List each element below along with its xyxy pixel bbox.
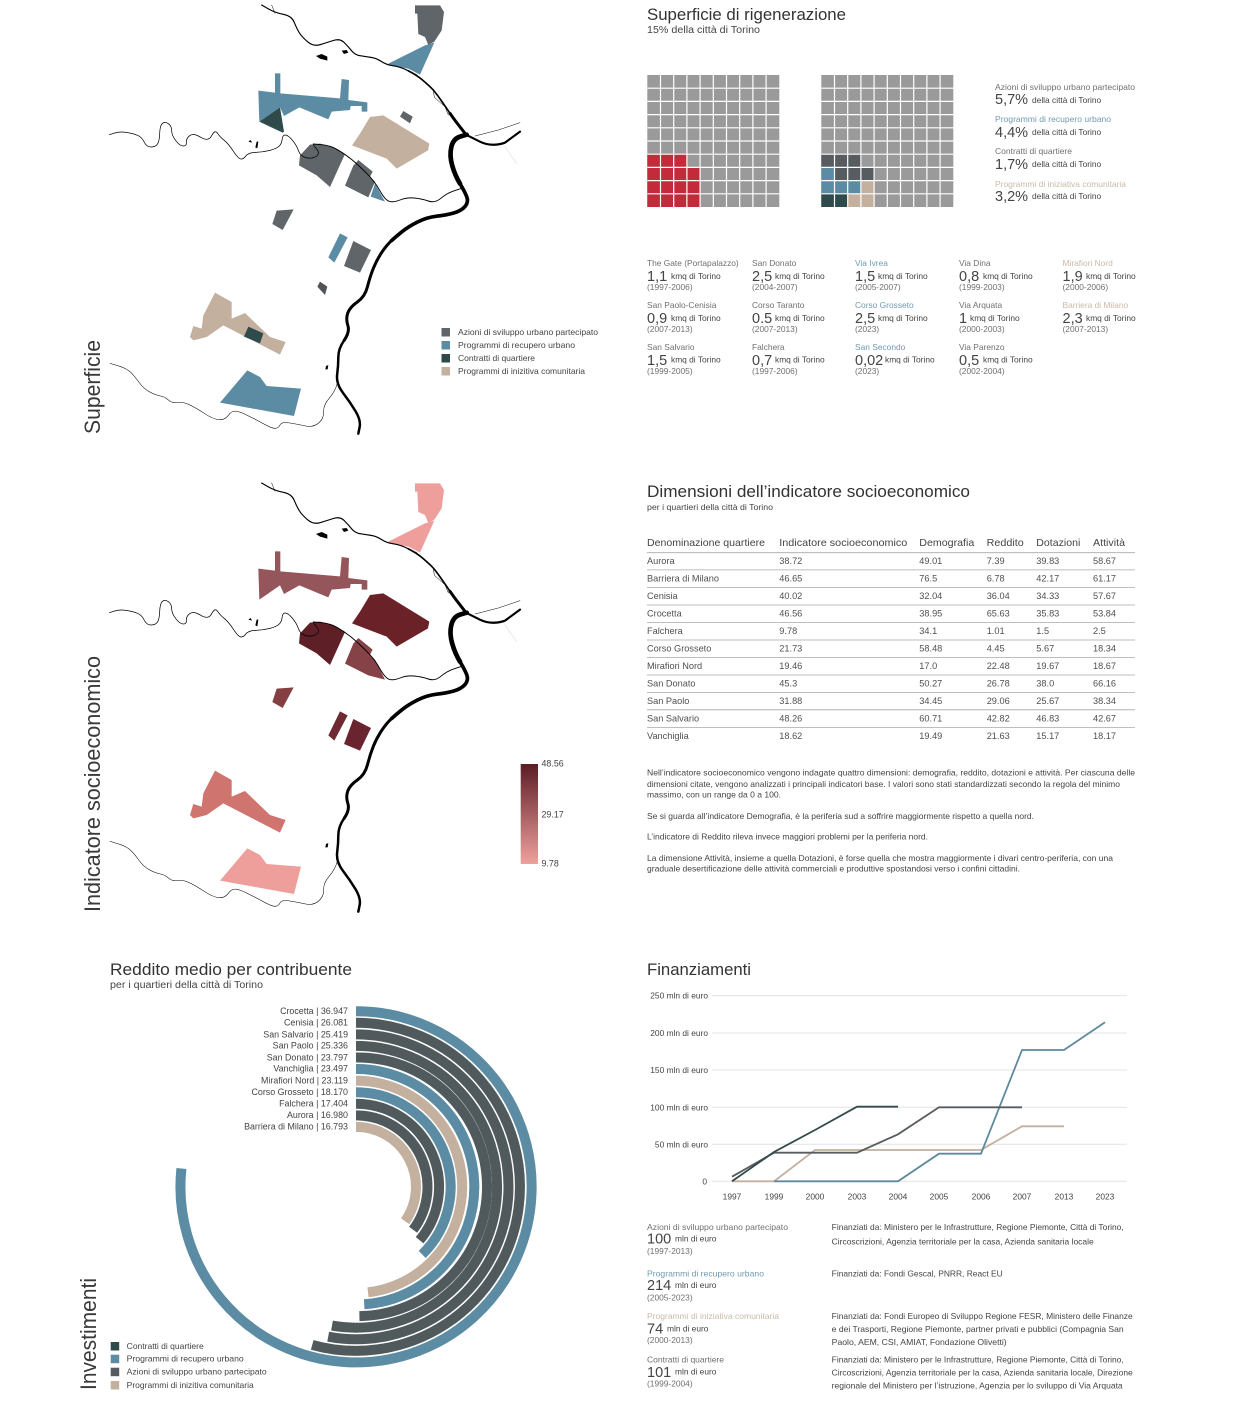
waffle legend with percentages: Azioni di sviluppo urbano partecipato <box>995 82 1135 92</box>
radial chart labels: Cenisia | 26.081 <box>284 1018 348 1028</box>
funding sources text: Paolo, AEM, CSI, AMIAT, Fondazione Olivetti) <box>832 1337 1007 1347</box>
legend: radial chart: Azioni di sviluppo urbano partecipato <box>127 1367 267 1377</box>
list of districts with area and years <box>647 258 1136 376</box>
waffle legend with percentages: 3,2% <box>995 189 1028 205</box>
table header: Denominazione quartiere <box>647 538 765 549</box>
list of districts with area and years: 2,3 <box>1062 311 1083 327</box>
text block: indicator explanation: graduale desertificazione delle attività commerciali e produttive spostandosi verso i confini cittadini. <box>647 864 1020 874</box>
funding summary: amounts per programme: 101 <box>647 1365 671 1381</box>
table: socioeconomic dimensions by district: 18.67 <box>1093 661 1116 671</box>
y axis labels: 50 mln di euro <box>655 1139 708 1149</box>
table: socioeconomic dimensions by district: 46.83 <box>1036 713 1059 723</box>
table: socioeconomic dimensions by district: 38.72 <box>779 556 802 566</box>
funding summary: amounts per programme: mln di euro <box>675 1367 717 1377</box>
y axis labels: 200 mln di euro <box>650 1028 708 1038</box>
table: socioeconomic dimensions by district: 38.95 <box>919 609 942 619</box>
list of districts with area and years: Via Parenzo <box>959 342 1005 352</box>
table: socioeconomic dimensions by district: Corso Grosseto <box>647 644 711 654</box>
table: socioeconomic dimensions by district: 15.17 <box>1036 731 1059 741</box>
list of districts with area and years: (2007-2013) <box>1062 324 1108 334</box>
list of districts with area and years: kmq di Torino <box>775 313 825 323</box>
x axis labels: 2007 <box>1013 1192 1032 1202</box>
table: socioeconomic dimensions by district: 38.0 <box>1036 679 1054 689</box>
legend: radial chart: Contratti di quartiere <box>127 1341 204 1351</box>
table: socioeconomic dimensions by district: 48.26 <box>779 713 802 723</box>
list of districts with area and years: Via Ivrea <box>855 258 888 268</box>
heading: Dimensioni dell'indicatore socioeconomico: per i quartieri della città di Torino <box>647 502 773 512</box>
funding summary: amounts per programme: Programmi di recupero urbano <box>647 1268 764 1278</box>
list of districts with area and years: Mirafiori Nord <box>1062 258 1113 268</box>
list of districts with area and years: San Donato <box>752 258 797 268</box>
table header <box>647 538 1125 549</box>
table: socioeconomic dimensions by district: 2.5 <box>1093 626 1106 636</box>
list of districts with area and years: (2000-2003) <box>959 324 1005 334</box>
table header: Demografia <box>919 538 975 549</box>
list of districts with area and years: 1,5 <box>855 269 875 285</box>
legend: map superficie: Azioni di sviluppo urbano partecipato <box>458 327 598 337</box>
funding summary: amounts per programme: (2000-2013) <box>647 1335 693 1345</box>
radial chart labels: Aurora | 16.980 <box>287 1110 348 1120</box>
funding summary: amounts per programme: mln di euro <box>667 1323 709 1333</box>
funding sources text: regionale del Ministero per l’istruzione, Agenzia per lo sviluppo di Via Arquata <box>832 1381 1123 1391</box>
y axis labels <box>650 991 708 1186</box>
legend: map superficie <box>442 327 598 376</box>
list of districts with area and years: Corso Grosseto <box>855 300 914 310</box>
table: socioeconomic dimensions by district: 4.45 <box>987 644 1005 654</box>
radial chart labels: Falchera | 17.404 <box>279 1098 348 1108</box>
list of districts with area and years: The Gate (Portapalazzo) <box>647 258 739 268</box>
table: socioeconomic dimensions by district: 76.5 <box>919 574 937 584</box>
list of districts with area and years: (2000-2006) <box>1062 282 1108 292</box>
list of districts with area and years: 0,9 <box>647 311 667 327</box>
heading: Dimensioni dell'indicatore socioeconomico <box>647 482 970 512</box>
x axis labels: 2000 <box>806 1192 825 1202</box>
table: socioeconomic dimensions by district: 26.78 <box>987 679 1010 689</box>
list of districts with area and years: 1,1 <box>647 269 667 285</box>
table: socioeconomic dimensions by district: 19.49 <box>919 731 942 741</box>
list of districts with area and years: San Salvario <box>647 342 695 352</box>
table: socioeconomic dimensions by district: 6.78 <box>987 574 1005 584</box>
table: socioeconomic dimensions by district: 58.48 <box>919 644 942 654</box>
x axis labels: 2005 <box>930 1192 949 1202</box>
funding summary: amounts per programme: (1997-2013) <box>647 1246 693 1256</box>
list of districts with area and years: 1,5 <box>647 353 667 369</box>
table: socioeconomic dimensions by district: Vanchiglia <box>647 731 690 741</box>
list of districts with area and years: San Secondo <box>855 342 906 352</box>
table: socioeconomic dimensions by district: Mirafiori Nord <box>647 661 702 671</box>
list of districts with area and years: (2007-2013) <box>647 324 693 334</box>
list of districts with area and years: 0,8 <box>959 269 979 285</box>
list of districts with area and years: 0.5 <box>752 311 772 327</box>
funding sources text: Circoscrizioni, Agenzia territoriale per la casa, Azienda sanitaria locale, Direzione <box>832 1367 1133 1377</box>
heading: Dimensioni dell'indicatore socioeconomico: Dimensioni dell’indicatore socioeconomico <box>647 482 970 501</box>
radial chart labels: Crocetta | 36.947 <box>280 1006 348 1016</box>
table: socioeconomic dimensions by district: 21.63 <box>987 731 1010 741</box>
list of districts with area and years: kmq di Torino <box>775 354 825 364</box>
funding summary: amounts per programme: mln di euro <box>675 1280 717 1290</box>
list of districts with area and years: kmq di Torino <box>878 271 928 281</box>
text block: indicator explanation: L’indicatore di Reddito rileva invece maggiori problemi per la periferia nord. <box>647 832 928 842</box>
table: socioeconomic dimensions by district: 50.27 <box>919 679 942 689</box>
table: socioeconomic dimensions by district: Crocetta <box>647 609 683 619</box>
table: socioeconomic dimensions by district: 17.0 <box>919 661 937 671</box>
table: socioeconomic dimensions by district: 19.46 <box>779 661 802 671</box>
list of districts with area and years: 0,7 <box>752 353 772 369</box>
text block: indicator explanation: Nell’indicatore socioeconomico vengono indagate quattro dimensioni: demografia, reddito, dotazioni e attività. Per ciascuna delle <box>647 768 1135 778</box>
table: socioeconomic dimensions by district: San Salvario <box>647 713 699 723</box>
funding summary: amounts per programme: 214 <box>647 1278 671 1294</box>
table: socioeconomic dimensions by district: 18.34 <box>1093 644 1116 654</box>
list of districts with area and years: Barriera di Milano <box>1062 300 1128 310</box>
list of districts with area and years: kmq di Torino <box>878 313 928 323</box>
list of districts with area and years: San Paolo-Cenisia <box>647 300 717 310</box>
y axis labels: 100 mln di euro <box>650 1102 708 1112</box>
radial chart labels: San Paolo | 25.336 <box>273 1041 348 1051</box>
funding sources text: Finanziati da: Ministero per le Infrastrutture, Regione Piemonte, Città di Torino, <box>832 1222 1124 1232</box>
table: socioeconomic dimensions by district: 34.1 <box>919 626 937 636</box>
gradient legend: indicator scale: 48.56 <box>542 758 564 768</box>
list of districts with area and years: (1997-2006) <box>647 282 693 292</box>
radial chart labels: Vanchiglia | 23.497 <box>273 1064 348 1074</box>
waffle legend with percentages: della città di Torino <box>1032 191 1102 201</box>
table: socioeconomic dimensions by district: 18.62 <box>779 731 802 741</box>
funding summary: amounts per programme <box>647 1222 788 1388</box>
x axis labels: 1997 <box>723 1192 742 1202</box>
list of districts with area and years: kmq di Torino <box>671 354 721 364</box>
table header: Dotazioni <box>1036 538 1080 549</box>
table: socioeconomic dimensions by district: 19.67 <box>1036 661 1059 671</box>
map: socioeconomic indicator <box>109 483 520 912</box>
table: socioeconomic dimensions by district: 39.83 <box>1036 556 1059 566</box>
table: socioeconomic dimensions by district: 61.17 <box>1093 574 1116 584</box>
list of districts with area and years: (2007-2013) <box>752 324 798 334</box>
funding summary: amounts per programme: mln di euro <box>675 1234 717 1244</box>
table: socioeconomic dimensions by district: 9.78 <box>779 626 797 636</box>
x axis labels: 2006 <box>972 1192 991 1202</box>
funding summary: amounts per programme: 100 <box>647 1232 671 1248</box>
table: socioeconomic dimensions by district: 49.01 <box>919 556 942 566</box>
funding sources text <box>832 1222 1133 1391</box>
funding summary: amounts per programme: Contratti di quartiere <box>647 1354 724 1364</box>
funding sources text: Finanziati da: Fondi Gescal, PNRR, React EU <box>832 1268 1003 1278</box>
table: socioeconomic dimensions by district: 46.65 <box>779 574 802 584</box>
section label: Superficie: Superficie <box>80 340 105 434</box>
list of districts with area and years: 1 <box>959 311 967 327</box>
table: socioeconomic dimensions by district: 57.67 <box>1093 591 1116 601</box>
waffle legend with percentages: Contratti di quartiere <box>995 146 1072 156</box>
table: socioeconomic dimensions by district: 58.67 <box>1093 556 1116 566</box>
legend: map superficie: Programmi di inizitiva comunitaria <box>458 366 585 376</box>
table: socioeconomic dimensions by district: 22.48 <box>987 661 1010 671</box>
table: socioeconomic dimensions by district: Aurora <box>647 556 675 566</box>
x axis labels: 2003 <box>848 1192 867 1202</box>
waffle chart: share by programme type <box>821 75 953 207</box>
table: socioeconomic dimensions by district: 42.17 <box>1036 574 1059 584</box>
table: socioeconomic dimensions by district: 38.34 <box>1093 696 1116 706</box>
table: socioeconomic dimensions by district <box>647 538 1135 741</box>
list of districts with area and years: (2023) <box>855 366 879 376</box>
list of districts with area and years: Via Dina <box>959 258 991 268</box>
waffle chart: 15% of the city <box>647 75 779 207</box>
map: superficie by programme type <box>109 5 520 434</box>
table: socioeconomic dimensions by district: 45.3 <box>779 679 797 689</box>
heading: Superficie di rigenerazione: 15% della città di Torino <box>647 25 760 36</box>
table header: Reddito <box>987 538 1024 549</box>
y axis labels: 150 mln di euro <box>650 1065 708 1075</box>
x axis labels: 2023 <box>1096 1192 1115 1202</box>
waffle legend with percentages: Programmi di iniziativa comunitaria <box>995 179 1126 189</box>
waffle legend with percentages: 4,4% <box>995 125 1028 141</box>
text block: indicator explanation <box>647 768 1135 874</box>
list of districts with area and years: (1999-2003) <box>959 282 1005 292</box>
list of districts with area and years: Via Arquata <box>959 300 1002 310</box>
funding sources text: Circoscrizioni, Agenzia territoriale per la casa, Azienda sanitaria locale <box>832 1237 1094 1247</box>
funding sources text: Finanziati da: Fondi Europeo di Sviluppo Regione FESR, Ministero delle Finanze <box>832 1311 1133 1321</box>
y axis labels: 250 mln di euro <box>650 991 708 1001</box>
waffle legend with percentages: della città di Torino <box>1032 159 1102 169</box>
funding sources text: Finanziati da: Ministero per le Infrastrutture, Regione Piemonte, Città di Torino, <box>832 1354 1124 1364</box>
table: socioeconomic dimensions by district: 46.56 <box>779 609 802 619</box>
waffle legend with percentages <box>995 82 1135 205</box>
table: socioeconomic dimensions by district: 66.16 <box>1093 679 1116 689</box>
waffle legend with percentages: 5,7% <box>995 92 1028 108</box>
list of districts with area and years: 1,9 <box>1062 269 1083 285</box>
waffle legend with percentages: della città di Torino <box>1032 127 1102 137</box>
table: socioeconomic dimensions by district: 40.02 <box>779 591 802 601</box>
list of districts with area and years: 0,02 <box>855 353 883 369</box>
list of districts with area and years: Falchera <box>752 342 785 352</box>
legend: map superficie: Programmi di recupero urbano <box>458 340 575 350</box>
list of districts with area and years: Corso Taranto <box>752 300 805 310</box>
text block: indicator explanation: massimo, con un range da 0 a 100. <box>647 790 781 800</box>
heading: Superficie di rigenerazione: Superficie di rigenerazione <box>647 5 846 24</box>
legend: map superficie: Contratti di quartiere <box>458 353 535 363</box>
radial chart labels <box>244 1006 348 1132</box>
table: socioeconomic dimensions by district: Falchera <box>647 626 684 636</box>
text block: indicator explanation: dimensioni citate, vengono analizzati i principali indicatori base. I valori sono stati standardizzati secondo la regola del minimo <box>647 779 1120 789</box>
radial chart labels: San Donato | 23.797 <box>267 1052 348 1062</box>
table: socioeconomic dimensions by district: 7.39 <box>987 556 1005 566</box>
table: socioeconomic dimensions by district: 53.84 <box>1093 609 1116 619</box>
table: socioeconomic dimensions by district: 25.67 <box>1036 696 1059 706</box>
table: socioeconomic dimensions by district: San Paolo <box>647 696 689 706</box>
table: socioeconomic dimensions by district: San Donato <box>647 679 696 689</box>
gradient legend: indicator scale: 9.78 <box>542 858 559 868</box>
list of districts with area and years: kmq di Torino <box>885 354 935 364</box>
x axis labels: 2004 <box>889 1192 908 1202</box>
x axis labels <box>723 1192 1115 1202</box>
waffle legend with percentages: della città di Torino <box>1032 95 1102 105</box>
x axis labels: 1999 <box>765 1192 784 1202</box>
radial chart labels: Corso Grosseto | 18.170 <box>251 1087 348 1097</box>
list of districts with area and years: (2002-2004) <box>959 366 1005 376</box>
gradient legend: indicator scale <box>521 758 564 868</box>
list of districts with area and years: kmq di Torino <box>671 271 721 281</box>
list of districts with area and years: (2004-2007) <box>752 282 798 292</box>
radial bar chart: average income per district <box>180 1011 532 1362</box>
list of districts with area and years: (1997-2006) <box>752 366 798 376</box>
table header: Indicatore socioeconomico <box>779 538 908 549</box>
x axis labels: 2013 <box>1055 1192 1074 1202</box>
heading: Reddito medio per contribuente: per i quartieri della città di Torino <box>110 980 263 991</box>
table: socioeconomic dimensions by district: 42.82 <box>987 713 1010 723</box>
table: socioeconomic dimensions by district: 34.45 <box>919 696 942 706</box>
table: socioeconomic dimensions by district: 60.71 <box>919 713 942 723</box>
table: socioeconomic dimensions by district: 65.63 <box>987 609 1010 619</box>
radial chart labels: Barriera di Milano | 16.793 <box>244 1122 348 1132</box>
funding summary: amounts per programme: Azioni di sviluppo urbano partecipato <box>647 1222 788 1232</box>
funding sources text: e dei Trasporti, Regione Piemonte, partner privati e pubblici (Compagnia San <box>832 1324 1124 1334</box>
text block: indicator explanation: La dimensione Attività, insieme a quella Dotazioni, è forse quella che mostra maggiormente i divari centro-periferia, con una <box>647 853 1113 863</box>
list of districts with area and years: 0,5 <box>959 353 979 369</box>
funding summary: amounts per programme: Programmi di iniziativa comunitaria <box>647 1311 779 1321</box>
y axis labels: 0 <box>702 1176 707 1186</box>
table: socioeconomic dimensions by district: 1.01 <box>987 626 1005 636</box>
list of districts with area and years: kmq di Torino <box>983 271 1033 281</box>
list of districts with area and years: (2023) <box>855 324 879 334</box>
radial chart labels: San Salvario | 25.419 <box>263 1029 348 1039</box>
list of districts with area and years: (2005-2007) <box>855 282 901 292</box>
list of districts with area and years: kmq di Torino <box>1086 271 1136 281</box>
table: socioeconomic dimensions by district: 21.73 <box>779 644 802 654</box>
legend: radial chart <box>111 1341 267 1390</box>
legend: radial chart: Programmi di recupero urbano <box>127 1354 244 1364</box>
list of districts with area and years: 2,5 <box>752 269 772 285</box>
funding summary: amounts per programme: (2005-2023) <box>647 1293 693 1303</box>
table: socioeconomic dimensions by district: 1.5 <box>1036 626 1049 636</box>
list of districts with area and years: kmq di Torino <box>671 313 721 323</box>
table: socioeconomic dimensions by district: 36.04 <box>987 591 1010 601</box>
heading: Reddito medio per contribuente: Reddito medio per contribuente <box>110 960 352 979</box>
waffle legend with percentages: 1,7% <box>995 157 1028 173</box>
table: socioeconomic dimensions by district: 29.06 <box>987 696 1010 706</box>
section label: Investimenti: Investimenti <box>76 1278 101 1390</box>
table: socioeconomic dimensions by district: 42.67 <box>1093 713 1116 723</box>
list of districts with area and years: kmq di Torino <box>775 271 825 281</box>
table header: Attività <box>1093 538 1125 549</box>
heading: Reddito medio per contribuente <box>110 960 352 991</box>
list of districts with area and years: kmq di Torino <box>970 313 1020 323</box>
list of districts with area and years: kmq di Torino <box>983 354 1033 364</box>
table: socioeconomic dimensions by district: 32.04 <box>919 591 942 601</box>
gradient legend: indicator scale: 29.17 <box>542 810 564 820</box>
heading: Superficie di rigenerazione <box>647 5 846 36</box>
legend: radial chart: Programmi di inizitiva comunitaria <box>127 1380 254 1390</box>
heading: Finanziamenti: Finanziamenti <box>647 960 751 979</box>
table: socioeconomic dimensions by district: 5.67 <box>1036 644 1054 654</box>
table: socioeconomic dimensions by district: 35.83 <box>1036 609 1059 619</box>
section label: Indicatore socioeconomico: Indicatore socioeconomico <box>80 656 105 912</box>
list of districts with area and years: (1999-2005) <box>647 366 693 376</box>
list of districts with area and years: 2,5 <box>855 311 875 327</box>
line chart: funding over time <box>650 991 1127 1202</box>
table: socioeconomic dimensions by district: Cenisia <box>647 591 679 601</box>
table: socioeconomic dimensions by district: Barriera di Milano <box>647 574 719 584</box>
table: socioeconomic dimensions by district: 31.88 <box>779 696 802 706</box>
text block: indicator explanation: Se si guarda all’indicatore Demografia, è la periferia sud a soffrire maggiormente rispetto a quella nord. <box>647 811 1034 821</box>
table: socioeconomic dimensions by district: 18.17 <box>1093 731 1116 741</box>
funding summary: amounts per programme: (1999-2004) <box>647 1378 693 1388</box>
funding summary: amounts per programme: 74 <box>647 1322 663 1338</box>
radial chart labels: Mirafiori Nord | 23.119 <box>261 1075 348 1085</box>
list of districts with area and years: kmq di Torino <box>1086 313 1136 323</box>
table: socioeconomic dimensions by district: 34.33 <box>1036 591 1059 601</box>
waffle legend with percentages: Programmi di recupero urbano <box>995 114 1111 124</box>
